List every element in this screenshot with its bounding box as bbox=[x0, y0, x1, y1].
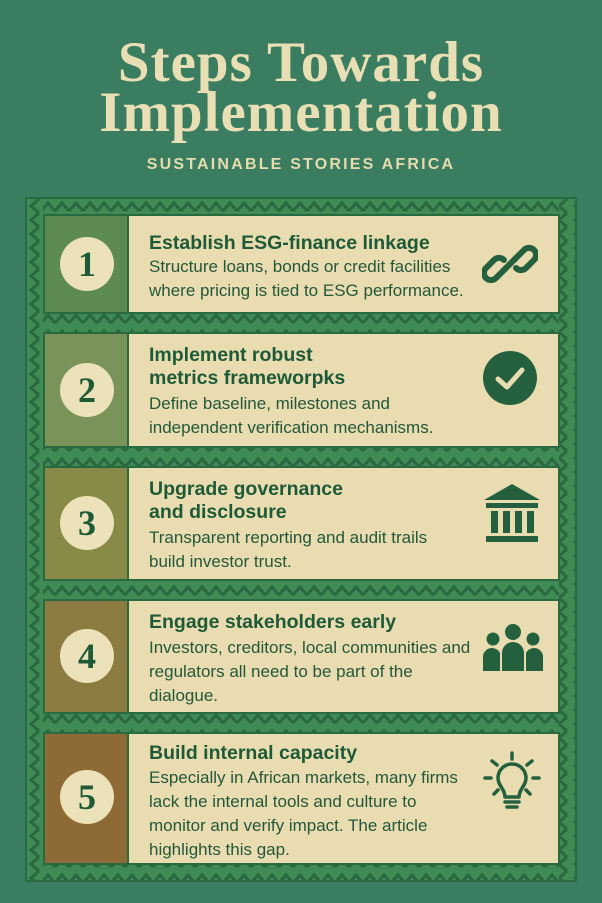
number 2: 2 bbox=[78, 370, 96, 410]
text 5: Build internal capacity bbox=[149, 742, 357, 764]
text 3: Upgrade governance bbox=[149, 478, 343, 500]
title: Steps Towards bbox=[118, 31, 484, 94]
title bbox=[99, 31, 503, 144]
text 3 bbox=[149, 478, 427, 571]
number 2 bbox=[60, 363, 114, 417]
number 3: 3 bbox=[78, 503, 96, 543]
icon: bank bbox=[484, 484, 540, 542]
number 1 bbox=[60, 237, 114, 291]
number 1: 1 bbox=[78, 244, 96, 284]
text 1: Structure loans, bonds or credit facilities where pricing is tied to ESG performance. bbox=[149, 257, 464, 300]
icon: check bbox=[483, 351, 537, 405]
card 2 bbox=[43, 332, 560, 448]
text 2 bbox=[149, 344, 433, 437]
text 5: Especially in African markets, many firms lack the internal tools and culture to monitor and verify impact. The article highlights this gap. bbox=[149, 768, 458, 859]
text 4: Engage stakeholders early bbox=[149, 611, 396, 633]
subtitle: SUSTAINABLE STORIES AFRICA bbox=[147, 156, 455, 173]
number 5 bbox=[60, 770, 114, 824]
text 4: Investors, creditors, local communities and regulators all need to be part of the dialogue. bbox=[149, 638, 470, 705]
number 3 bbox=[60, 496, 114, 550]
number 4 bbox=[60, 629, 114, 683]
icon: link bbox=[482, 244, 538, 284]
text 2: metrics frameworpks bbox=[149, 367, 345, 389]
text 1 bbox=[149, 232, 464, 300]
number 5: 5 bbox=[78, 777, 96, 817]
icon: lightbulb bbox=[483, 751, 541, 809]
text 1: Establish ESG-finance linkage bbox=[149, 232, 430, 254]
card 5 bbox=[43, 732, 560, 865]
card 1 bbox=[43, 214, 560, 314]
card 4 bbox=[43, 599, 560, 714]
card 3 bbox=[43, 466, 560, 581]
title: Implementation bbox=[99, 81, 503, 144]
icon: people bbox=[483, 624, 543, 671]
frame with zigzag border bbox=[25, 197, 577, 882]
text 3: and disclosure bbox=[149, 501, 287, 523]
text 2: Implement robust bbox=[149, 344, 313, 366]
text 2: Define baseline, milestones and independent verification mechanisms. bbox=[149, 394, 433, 437]
text 3: Transparent reporting and audit trails build investor trust. bbox=[149, 528, 427, 571]
number 4: 4 bbox=[78, 636, 96, 676]
